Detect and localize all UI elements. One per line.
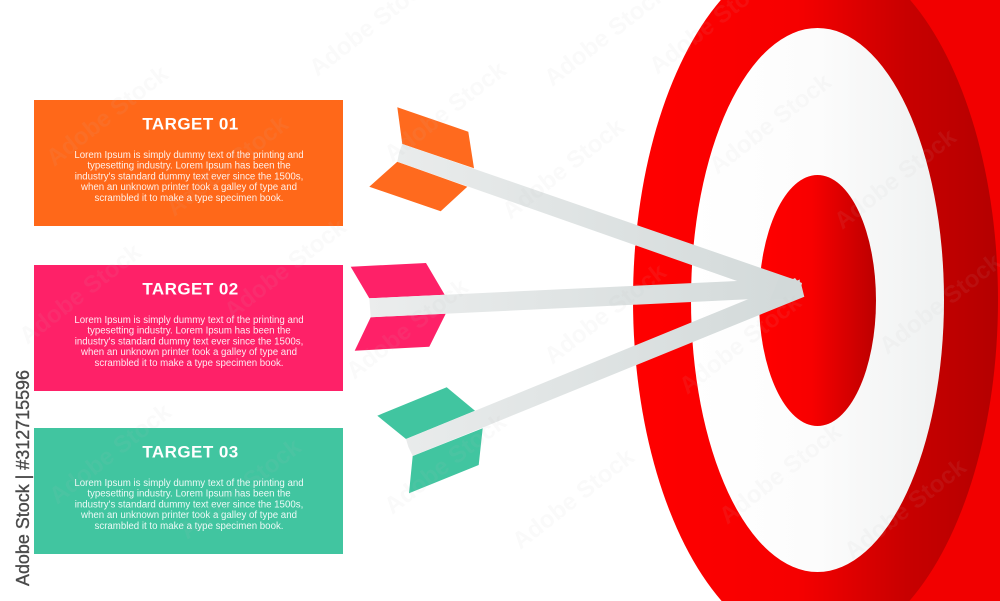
panel: target 03: typesetting industry. Lorem Ipsum has been the (87, 489, 291, 500)
panel: target 03: when an unknown printer took a galley of type and (80, 510, 297, 521)
stock watermarks: Adobe Stock (219, 213, 352, 325)
panel: target 03: scrambled it to make a type specimen book. (94, 521, 284, 532)
stock watermarks: Adobe Stock (829, 123, 962, 235)
stock watermarks: Adobe Stock (714, 418, 847, 530)
stock watermarks: Adobe Stock (704, 68, 837, 180)
stock watermarks: Adobe Stock (497, 113, 630, 225)
panel: target 01: typesetting industry. Lorem Ipsum has been the (87, 161, 291, 172)
stock watermarks: Adobe Stock (379, 408, 512, 520)
stock id label: Adobe Stock | #312715596 (13, 370, 33, 586)
arrow: green (377, 285, 804, 493)
stock watermarks: Adobe Stock (674, 288, 807, 400)
panel: target 02 (34, 265, 343, 391)
arrow: orange (369, 107, 804, 298)
panel: target 03: TARGET 03 (142, 442, 239, 462)
panel: target 03: Lorem Ipsum is simply dummy text of the printing and (74, 478, 304, 489)
panel: target 02: when an unknown printer took a galley of type and (80, 347, 297, 358)
panel: target 01: when an unknown printer took a galley of type and (80, 182, 297, 193)
stock watermarks: Adobe Stock (839, 453, 972, 565)
target side depth (815, 0, 1000, 601)
stock watermarks: Adobe Stock (161, 110, 294, 222)
stock watermarks: Adobe Stock (41, 60, 174, 172)
stock watermarks: Adobe Stock (539, 258, 672, 370)
target bullseye (759, 175, 876, 426)
panel: target 01 (34, 100, 343, 226)
panel: target 02: Lorem Ipsum is simply dummy text of the printing and (74, 315, 304, 326)
panel: target 01: scrambled it to make a type specimen book. (94, 193, 284, 204)
panel: target 01: TARGET 01 (142, 114, 239, 134)
arrow tips impact (770, 276, 804, 300)
stock watermarks: Adobe Stock (174, 433, 307, 545)
stock watermarks: Adobe Stock (44, 398, 177, 510)
target white ring (691, 28, 944, 572)
panel: target 02: typesetting industry. Lorem Ipsum has been the (87, 326, 291, 337)
stock watermarks: Adobe Stock (379, 56, 512, 168)
arrow: pink (351, 263, 790, 351)
panel: target 03 (34, 428, 343, 554)
stock watermarks: Adobe Stock (341, 273, 474, 385)
stock watermarks: Adobe Stock (14, 238, 147, 350)
stock watermarks: Adobe Stock (507, 443, 640, 555)
panel: target 02: TARGET 02 (142, 280, 239, 298)
panel: target 03: industry's standard dummy text ever since the 1500s, (75, 499, 303, 510)
panel: target 02: industry's standard dummy text ever since the 1500s, (75, 336, 303, 347)
target board (633, 0, 1000, 601)
panel: target 02: scrambled it to make a type specimen book. (94, 358, 284, 369)
target outer ring (633, 0, 998, 601)
panel: target 01: Lorem Ipsum is simply dummy text of the printing and (74, 150, 304, 161)
panel: target 01: industry's standard dummy text ever since the 1500s, (75, 171, 303, 182)
